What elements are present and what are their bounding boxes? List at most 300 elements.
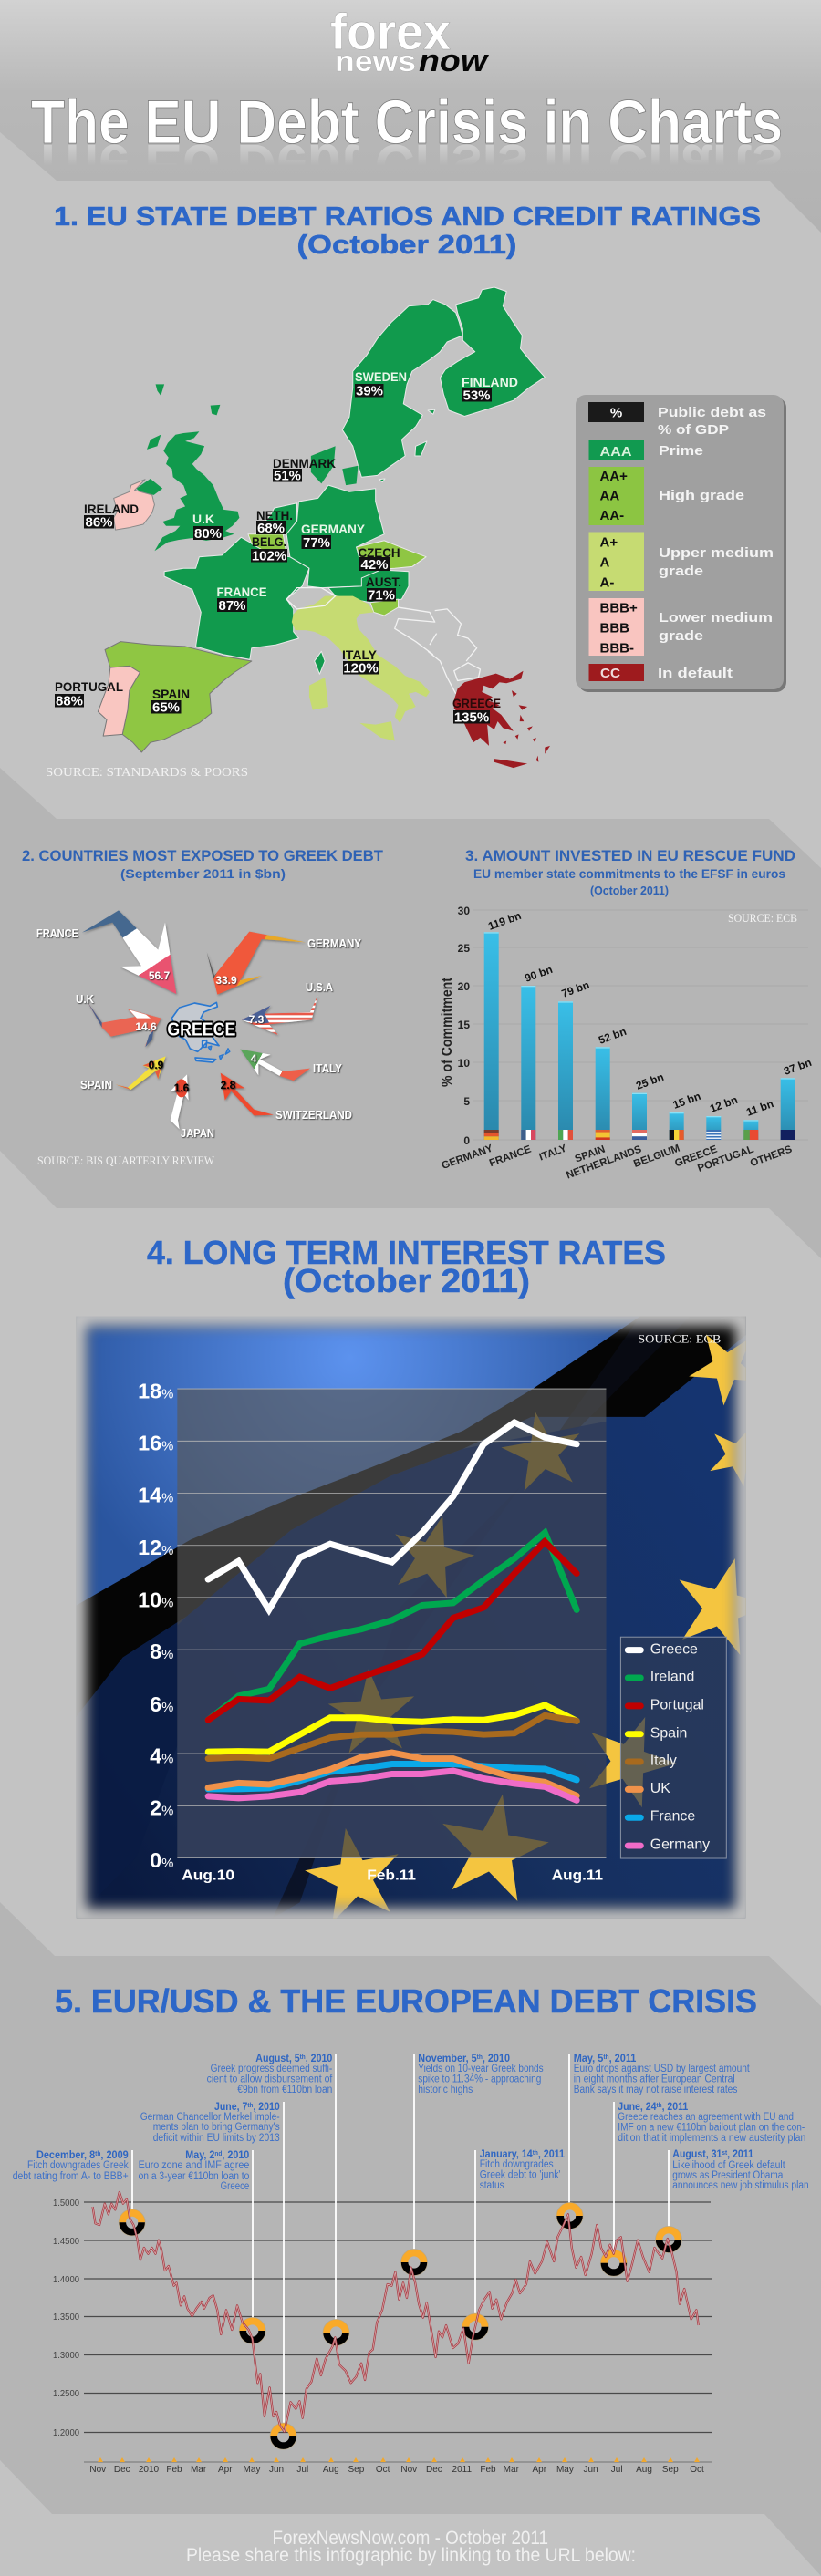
chart legend: Germany <box>650 1837 710 1853</box>
Portugal line <box>208 1542 577 1720</box>
map labels <box>55 370 518 726</box>
heading: section 3 <box>465 848 795 897</box>
annotation: May 2011: in eight months after European Central <box>574 2074 735 2085</box>
annotation: November 2010: spike to 11.34% - approaching <box>418 2074 541 2085</box>
annotation: August 2011: August, 31 <box>672 2149 726 2160</box>
UK line <box>208 1753 577 1795</box>
label: Spain: SPAIN <box>152 688 190 701</box>
heading: section 4 <box>147 1234 666 1299</box>
Greece line <box>208 1422 577 1609</box>
annotation: June 2010: ments plan to bring Germany's <box>153 2122 280 2133</box>
exposure labels: 14.6 <box>135 1020 157 1033</box>
label: Germany: GERMANY <box>301 522 365 536</box>
annotation: June 2010: German Chancellor Merkel imple- <box>140 2112 280 2123</box>
x axis labels: Feb.11 <box>367 1867 416 1883</box>
annotation: August 2010: Greek progress deemed suffi- <box>211 2064 332 2074</box>
exposure labels: U.K <box>76 992 95 1006</box>
UK and north <box>137 384 239 551</box>
chart legend: UK <box>650 1781 670 1796</box>
annotation: May 2010: , 2010 <box>222 2150 249 2161</box>
annotation: August 2011: , 2011 <box>727 2149 754 2160</box>
annotation: June 2010: th <box>247 2103 253 2109</box>
arrow: Japan <box>171 1074 189 1129</box>
rating legend: AA <box>600 489 619 503</box>
time axis: Aug <box>636 2465 652 2475</box>
time axis: May <box>556 2465 574 2475</box>
label: Italy <box>342 648 379 677</box>
x labels: ITALY <box>537 1143 568 1164</box>
flags <box>484 1130 795 1140</box>
arrow: France <box>82 910 176 994</box>
price line <box>93 2192 699 2432</box>
annotation: January 2011 <box>480 2149 566 2191</box>
value labels: 11 bn <box>744 1097 775 1119</box>
annotation: June 2011: June, 24 <box>618 2102 660 2113</box>
label: Germany <box>301 522 365 551</box>
label: Sweden: 39% <box>356 383 383 399</box>
y labels: 1.5000 <box>53 2198 79 2209</box>
y axis labels: 16% <box>138 1432 173 1455</box>
heading: section 1: (October 2011) <box>297 231 516 260</box>
label: Denmark: DENMARK <box>273 457 336 471</box>
label: Ireland <box>84 502 139 531</box>
annotation: June 2010: , 2010 <box>253 2102 280 2113</box>
annotation: January 2011: , 2011 <box>538 2149 566 2160</box>
footer <box>186 2528 636 2566</box>
time axis: May <box>244 2465 260 2475</box>
Spain line <box>208 1705 577 1752</box>
annotation: June 2011: , 2011 <box>662 2102 689 2113</box>
source: BIS: SOURCE: BIS QUARTERLY REVIEW <box>37 1154 215 1167</box>
source: Standard and Poors: SOURCE: STANDARDS & POORS <box>46 765 248 779</box>
y axis labels: 2% <box>150 1796 173 1820</box>
heading: section 3: EU member state commitments to the EFSF in euros <box>473 866 785 881</box>
Greece <box>454 671 550 768</box>
EUR/USD chart <box>53 2054 712 2475</box>
annotation: May 2010: May, 2 <box>185 2150 217 2161</box>
Greece map icon <box>171 1002 230 1062</box>
annotation: December 2009: th <box>95 2151 100 2157</box>
x labels: BELGIUM <box>632 1143 681 1170</box>
time axis: 2010 <box>139 2465 160 2475</box>
annotation: January 2011: Greek debt to 'junk' <box>480 2170 560 2181</box>
label: Italy: ITALY <box>342 648 377 662</box>
Corsica <box>315 651 325 674</box>
vignette <box>77 1316 745 1919</box>
label: Netherlands <box>256 509 293 536</box>
x axis labels <box>182 1867 603 1883</box>
time axis: Mar <box>504 2465 520 2475</box>
rating legend: grade <box>659 564 703 579</box>
label: Czech <box>358 546 400 573</box>
y labels <box>53 2198 79 2438</box>
chart legend: Italy <box>650 1754 677 1769</box>
rating legend: In default <box>658 666 733 681</box>
grid lines <box>84 2202 712 2433</box>
rating legend: Upper medium <box>659 545 774 561</box>
label: Austria: AUST. <box>366 575 401 589</box>
exposure labels: 4 <box>251 1052 257 1065</box>
x labels: OTHERS <box>749 1143 794 1169</box>
time axis: Jul <box>296 2465 308 2475</box>
value labels: 90 bn <box>523 963 554 985</box>
time axis: Feb <box>166 2465 182 2475</box>
annotation: August 2011: st <box>722 2150 728 2157</box>
label: Ireland: IRELAND <box>84 502 139 516</box>
time axis: Oct <box>690 2465 704 2475</box>
bar chart: 20 <box>458 980 470 993</box>
bars <box>484 932 795 1140</box>
label: Greece: 135% <box>454 709 489 726</box>
annotation: August 2010: cient to allow disbursement of <box>207 2074 333 2085</box>
chart legend: France <box>650 1809 695 1825</box>
y labels: 1.2500 <box>53 2388 79 2399</box>
x labels: FRANCE <box>488 1143 533 1169</box>
time axis: Jul <box>611 2465 623 2475</box>
time axis: Feb <box>480 2465 496 2475</box>
time axis: Jun <box>583 2465 598 2475</box>
label: France <box>217 585 266 614</box>
chart legend <box>620 1637 726 1858</box>
label: Portugal <box>55 680 123 709</box>
France <box>164 537 309 659</box>
heading: section 5: 5. EUR/USD & THE EUROPEAN DEBT CRISIS <box>55 1982 757 2020</box>
annotation: June 2010: deficit within EU limits by 2013 <box>153 2133 280 2144</box>
heading: section 2: (September 2011 in $bn) <box>120 866 286 881</box>
heading: section 1 <box>54 202 761 260</box>
annotation: December 2009: , 2009 <box>100 2150 129 2161</box>
label: Finland <box>462 376 518 403</box>
annotation: August 2010: , 2010 <box>306 2054 332 2064</box>
value labels: 15 bn <box>671 1090 702 1112</box>
heading: section 3: (October 2011) <box>590 885 669 897</box>
annotation: December 2009 <box>13 2150 129 2182</box>
y axis title: % of Commitment <box>440 978 455 1087</box>
label: France: FRANCE <box>217 585 266 599</box>
label: Sweden <box>355 370 407 399</box>
rating legend: High grade <box>659 488 744 503</box>
time axis: Nov <box>400 2465 417 2475</box>
exposure labels: U.S.A <box>306 980 334 994</box>
bar chart: 30 <box>458 905 470 917</box>
Austria <box>328 570 409 603</box>
label: Austria: 71% <box>368 587 395 604</box>
y axis labels: 0% <box>150 1848 173 1872</box>
annotation: May 2010: Greece <box>221 2181 249 2192</box>
rating legend: AAA <box>600 444 632 460</box>
arrow: UK <box>88 1003 161 1047</box>
heading: section 3: 3. AMOUNT INVESTED IN EU RESCUE FUND <box>465 848 795 864</box>
heading: section 2: 2. COUNTRIES MOST EXPOSED TO GREEK DEBT <box>22 848 383 864</box>
label: Portugal: PORTUGAL <box>55 680 123 694</box>
arrow: Switzerland <box>221 1073 274 1115</box>
source: ECB: SOURCE: ECB <box>728 912 797 925</box>
label: Spain: 65% <box>152 700 180 715</box>
x labels: NETHERLANDS <box>565 1143 643 1182</box>
stars <box>299 1314 782 1926</box>
value labels: 12 bn <box>708 1093 739 1115</box>
annotation: January 2011: January, 14 <box>480 2149 536 2160</box>
annotation: November 2010: historic highs <box>418 2085 473 2095</box>
time axis: Nov <box>89 2465 106 2475</box>
y labels: 1.4500 <box>53 2236 79 2247</box>
annotation: May 2011: th <box>603 2054 609 2061</box>
annotation: November 2010: Yields on 10-year Greek bonds <box>418 2064 544 2074</box>
annotation: November 2010: November, 5 <box>418 2054 481 2064</box>
Ireland <box>114 480 154 530</box>
exposure labels: SPAIN <box>80 1078 112 1091</box>
chart legend: Ireland <box>650 1669 694 1684</box>
exposure labels: 7.3 <box>249 1013 265 1026</box>
annotation: August 2011: grows as President Obama <box>672 2170 784 2181</box>
exposure labels: 33.9 <box>215 974 237 987</box>
value labels: 119 bn <box>486 909 523 933</box>
label: Greece <box>452 697 501 726</box>
value labels <box>486 909 813 1119</box>
flag background <box>77 1314 782 1926</box>
label: France: 87% <box>218 598 246 614</box>
annotation: June 2011 <box>618 2102 805 2144</box>
y axis labels: 10% <box>138 1588 173 1611</box>
logo: forex news now: now <box>419 44 490 78</box>
bar chart: 15 <box>458 1019 470 1031</box>
label: Belgium <box>251 535 287 564</box>
x labels: PORTUGAL <box>696 1144 755 1174</box>
dimmed stars in plot <box>299 1314 782 1926</box>
x labels: SPAIN <box>574 1144 607 1165</box>
Germany line <box>208 1771 577 1800</box>
greece label: GREECE <box>167 1019 235 1040</box>
value labels: 37 bn <box>782 1056 813 1078</box>
annotation: June 2010: June, 7 <box>214 2102 251 2113</box>
footer: Please share this infographic by linking to the URL below: <box>186 2545 636 2566</box>
x axis labels: Aug.11 <box>552 1867 603 1883</box>
annotation: May 2011: , 2011 <box>609 2054 637 2064</box>
rating legend: BBB- <box>600 640 634 657</box>
x labels: GREECE <box>673 1143 719 1169</box>
time axis: Mar <box>191 2465 207 2475</box>
source: ECB chart: SOURCE: ECB <box>638 1331 721 1345</box>
annotation: August 2010: August, 5 <box>255 2054 304 2064</box>
label: Greece: GREECE <box>452 697 501 710</box>
label: Netherlands: NETH. <box>256 509 293 522</box>
Italy line <box>208 1715 577 1759</box>
rating legend: Prime <box>659 443 703 459</box>
label: Finland: 53% <box>462 388 491 403</box>
y axis labels <box>138 1380 173 1872</box>
Switzerland and Balkans outlines <box>286 588 480 694</box>
y axis labels: 18% <box>138 1380 173 1403</box>
value labels: 52 bn <box>597 1025 628 1047</box>
Slovenia <box>370 599 399 616</box>
value labels: 79 bn <box>560 978 591 1000</box>
exposure labels: 1.6 <box>174 1081 190 1094</box>
footer: ForexNewsNow.com - October 2011 <box>272 2528 548 2549</box>
x axis labels: Aug.10 <box>182 1867 234 1883</box>
bar chart <box>440 905 813 1182</box>
rating legend: % of GDP <box>658 422 729 438</box>
rating legend: AA+ <box>600 469 628 484</box>
logo: forex news now: news <box>335 45 416 78</box>
annotation: December 2009: debt rating from A- to BBB+ <box>13 2171 129 2182</box>
y labels: 1.4000 <box>53 2274 79 2285</box>
annotation: May 2010: nd <box>214 2151 222 2157</box>
label: Netherlands: 68% <box>257 521 285 536</box>
annotation: June 2011: Greece reaches an agreement with EU and <box>618 2112 794 2123</box>
rating legend: BBB <box>600 620 629 636</box>
exposure labels: 0.9 <box>149 1059 164 1071</box>
time axis <box>84 2457 712 2475</box>
exposure labels: ITALY <box>313 1061 342 1075</box>
Netherlands <box>255 503 297 534</box>
rating legend: BBB+ <box>600 600 638 616</box>
time axis: Apr <box>533 2465 547 2475</box>
label: Ireland: 86% <box>85 514 113 531</box>
y axis labels: 12% <box>138 1536 173 1559</box>
Germany <box>286 485 384 588</box>
bar chart: 10 <box>458 1057 470 1070</box>
label: Belgium: 102% <box>252 549 286 564</box>
time axis: Aug <box>323 2465 339 2475</box>
annotation: November 2010 <box>418 2054 544 2095</box>
annotation: August 2010: €9bn from €110bn loan <box>237 2085 332 2095</box>
bar chart: 0 <box>463 1134 470 1147</box>
logo: forex news now: forex <box>330 3 451 60</box>
annotation: August 2011: Likelihood of Greek default <box>672 2160 785 2171</box>
Czech <box>357 541 426 570</box>
annotation: August 2010 <box>207 2054 333 2095</box>
annotation: November 2010: th <box>477 2054 483 2061</box>
annotation: May 2010: Euro zone and IMF agree <box>139 2160 249 2171</box>
annotation: May 2010 <box>139 2150 249 2192</box>
heading: section 4: 4. LONG TERM INTEREST RATES <box>147 1234 666 1271</box>
Denmark <box>311 446 359 485</box>
rating legend: CC <box>600 666 620 681</box>
annotation: May 2011: Bank says it may not raise interest rates <box>574 2085 738 2095</box>
exposure labels: 56.7 <box>149 969 171 982</box>
label: Denmark: 51% <box>274 469 301 483</box>
Spain <box>105 642 252 752</box>
annotation: August 2011 <box>672 2149 809 2191</box>
label: Austria <box>366 575 401 604</box>
Italy <box>292 596 430 740</box>
annotation: November 2010: , 2010 <box>483 2054 510 2064</box>
map of Europe <box>98 287 550 768</box>
rating legend: Public debt as <box>658 405 766 420</box>
rating legend: % <box>610 405 622 421</box>
chart legend: Greece <box>650 1642 698 1658</box>
Portugal <box>98 666 140 736</box>
time axis: 2011 <box>452 2465 472 2475</box>
exposure labels: GERMANY <box>307 936 361 950</box>
plot area <box>177 1389 606 1858</box>
arrow: Spain <box>116 1056 166 1090</box>
label: Denmark <box>273 457 336 483</box>
label: Czech: 42% <box>360 557 389 573</box>
heading: section 1: 1. EU STATE DEBT RATIOS AND CREDIT RATINGS <box>54 202 761 232</box>
exposure labels: FRANCE <box>36 926 78 940</box>
annotation: May 2011 <box>574 2054 750 2095</box>
annotation: June 2011: dition that it implements a new austerity plan <box>618 2133 805 2144</box>
y labels: 1.3000 <box>53 2350 79 2361</box>
annotation: August 2010: th <box>300 2054 306 2061</box>
y axis labels: 4% <box>150 1744 173 1768</box>
label: Sweden: SWEDEN <box>355 370 407 384</box>
annotation: December 2009: December, 8 <box>36 2150 99 2161</box>
bar chart: 25 <box>458 942 470 955</box>
rate lines <box>208 1422 577 1800</box>
heading: section 4: (October 2011) <box>283 1262 530 1299</box>
rating legend: A+ <box>600 534 618 551</box>
label: Czech: CZECH <box>358 546 400 560</box>
arrow: USA <box>242 996 317 1035</box>
Finland <box>440 287 545 416</box>
rating legend: Lower medium <box>659 610 773 626</box>
exposure arrows <box>82 910 317 1129</box>
annotation: June 2011: th <box>657 2103 662 2109</box>
Sweden <box>342 300 462 482</box>
annotation: June 2010 <box>140 2102 280 2144</box>
time axis: Sep <box>348 2465 365 2475</box>
rating legend: A <box>600 554 609 571</box>
annotation: December 2009: Fitch downgrades Greek <box>27 2160 129 2171</box>
y labels: 1.3500 <box>53 2312 79 2323</box>
arrow: Italy <box>240 1050 310 1081</box>
label: Portugal: 88% <box>56 693 83 709</box>
time axis: Oct <box>376 2465 390 2475</box>
time axis: Apr <box>218 2465 233 2475</box>
white event lines <box>132 2054 669 2424</box>
time axis: Dec <box>426 2465 442 2475</box>
time axis: Jun <box>269 2465 284 2475</box>
exposure labels: SWITZERLAND <box>275 1108 352 1122</box>
interest rate chart on EU flag <box>77 1314 782 1926</box>
chart legend: Spain <box>650 1726 687 1742</box>
heading: section 2 <box>22 848 383 881</box>
annotation: January 2011: Fitch downgrades <box>480 2159 554 2170</box>
label: Spain <box>151 688 190 715</box>
y labels: 1.2000 <box>53 2427 79 2438</box>
label: Germany: 77% <box>303 535 330 551</box>
gridlines <box>177 1389 606 1858</box>
annotation: January 2011: status <box>480 2180 504 2191</box>
Belgium <box>248 534 286 553</box>
rating legend: A- <box>600 574 614 591</box>
annotation: May 2010: on a 3-year €110bn loan to <box>139 2171 249 2182</box>
annotation: January 2011: th <box>533 2150 538 2157</box>
logo: forex news now <box>330 3 490 78</box>
value labels: 25 bn <box>634 1071 665 1092</box>
chart legend: Portugal <box>650 1697 704 1712</box>
label: Belgium: BELG. <box>252 535 286 549</box>
arrow: Germany <box>207 932 306 995</box>
Ireland line <box>208 1533 577 1720</box>
label: Finland: FINLAND <box>462 376 518 389</box>
y axis labels: 6% <box>150 1692 173 1716</box>
time axis: Sep <box>662 2465 679 2475</box>
rating legend <box>576 395 786 692</box>
bar chart: 5 <box>463 1095 470 1108</box>
exposure labels: JAPAN <box>181 1126 214 1140</box>
y axis labels: 14% <box>138 1483 173 1506</box>
France line <box>208 1764 577 1789</box>
event markers <box>119 2203 681 2449</box>
exposure labels: 2.8 <box>221 1079 236 1091</box>
exposure labels <box>36 926 361 1140</box>
y axis labels: 8% <box>150 1640 173 1663</box>
annotation: May 2011: Euro drops against USD by largest amount <box>574 2064 750 2074</box>
rating legend: AA- <box>600 508 624 523</box>
